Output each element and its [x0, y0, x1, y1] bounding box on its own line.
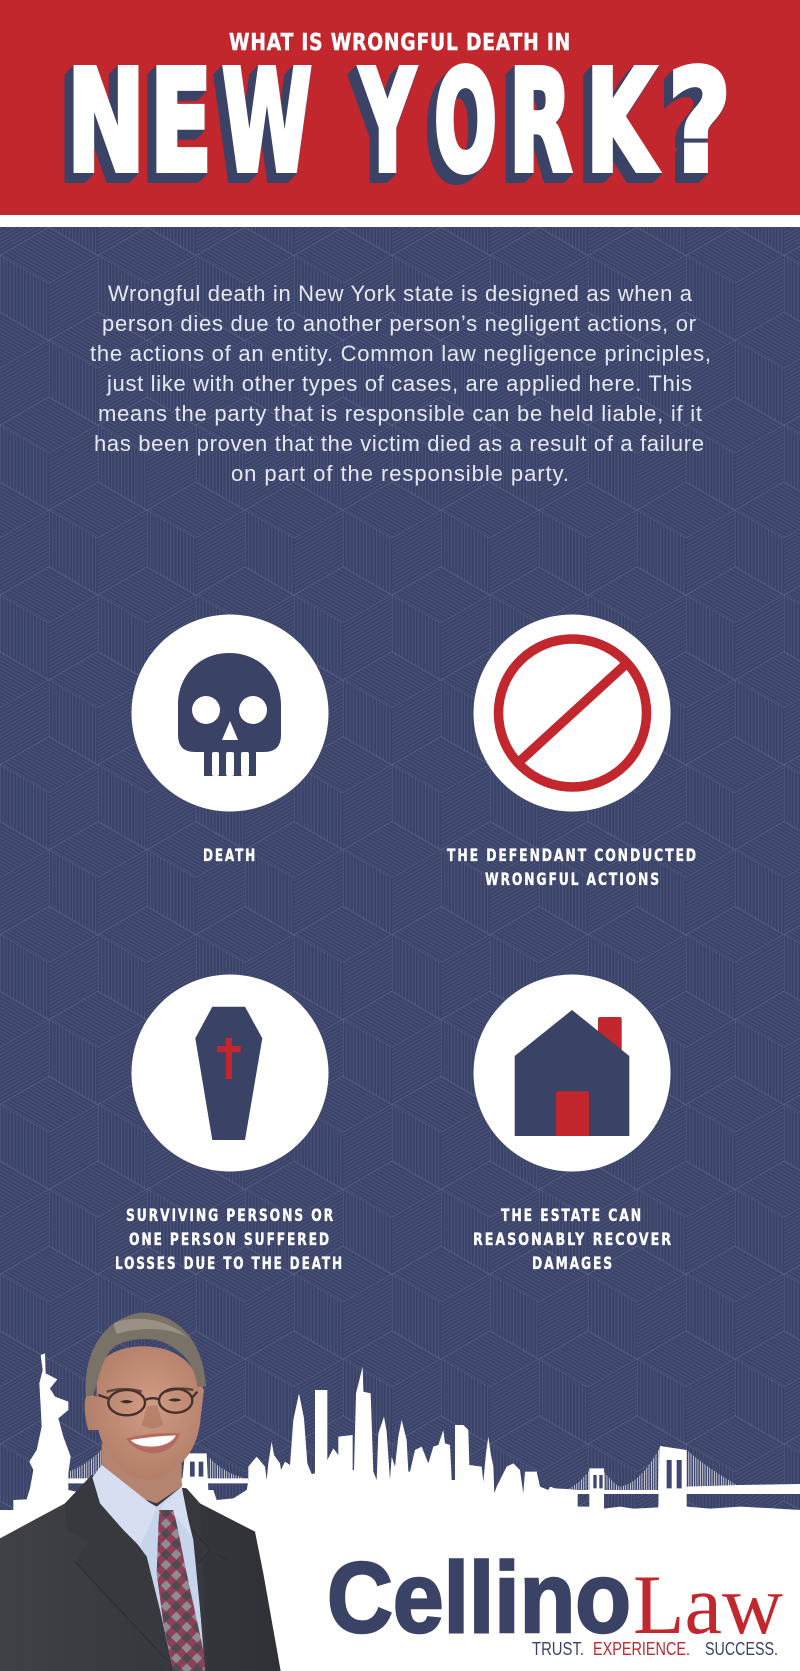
label: estate: DAMAGES [532, 1254, 614, 1273]
intro paragraph: on part of the responsible party. [231, 461, 569, 486]
intro paragraph: person dies due to another person’s negligent actions, or [102, 311, 696, 336]
tagline: SUCCESS. [705, 1639, 778, 1659]
intro paragraph: the actions of an entity. Common law negligence principles, [90, 341, 711, 366]
icon: house [515, 1010, 629, 1136]
tagline [532, 1639, 778, 1659]
panel: red title banner [0, 0, 800, 215]
necktie [157, 1510, 205, 1671]
title: New York: ? [668, 41, 731, 204]
panel: wrongful actions [447, 614, 698, 889]
wordmark Cellino: Cellino [327, 1542, 631, 1654]
label: surviving persons: SURVIVING PERSONS OR [126, 1206, 335, 1225]
lapels [65, 1475, 210, 1671]
label: estate: THE ESTATE CAN [501, 1206, 643, 1225]
panel: surviving persons [115, 974, 344, 1273]
hair [86, 1313, 206, 1397]
title: New York: N [67, 41, 145, 204]
icon: prohibited sign [498, 639, 646, 787]
brows and eyes [107, 1389, 193, 1392]
title eyebrow: WHAT IS WRONGFUL DEATH IN [229, 30, 571, 56]
title: New York: O [434, 41, 497, 204]
neck [102, 1443, 182, 1503]
label: wrongful actions: WRONGFUL ACTIONS [485, 870, 661, 889]
portrait of attorney [0, 1313, 281, 1671]
logo: Cellino Law [327, 1542, 784, 1659]
label: surviving persons: ONE PERSON SUFFERED [129, 1230, 331, 1249]
nose and smile [142, 1405, 163, 1428]
icon: skull [178, 653, 281, 776]
panel: estate [473, 974, 673, 1273]
panel: death [132, 614, 328, 865]
icon: coffin [195, 1007, 262, 1140]
eyeglasses [98, 1389, 197, 1415]
title: New York: R [509, 41, 572, 204]
intro paragraph: means the party that is responsible can be held liable, if it [98, 401, 702, 426]
label: estate [473, 1206, 673, 1273]
footer skyline silhouette [0, 1353, 800, 1671]
title: New York: E [150, 41, 212, 204]
label: surviving persons: LOSSES DUE TO THE DEATH [115, 1254, 344, 1273]
shirt [91, 1465, 205, 1671]
tagline: EXPERIENCE. [593, 1639, 690, 1659]
face [85, 1346, 204, 1480]
label: wrongful actions [447, 846, 698, 889]
label: death: DEATH [203, 846, 257, 865]
tagline: TRUST. [532, 1639, 584, 1659]
title: New York: W [222, 41, 312, 204]
label: surviving persons [115, 1206, 344, 1273]
intro paragraph: just like with other types of cases, are applied here. This [106, 371, 692, 396]
intro paragraph: has been proven that the victim died as a result of a failure [94, 431, 704, 456]
title: New York: K [586, 41, 658, 204]
label: estate: REASONABLY RECOVER [473, 1230, 673, 1249]
title: New York: Y [359, 41, 416, 204]
label: wrongful actions: THE DEFENDANT CONDUCTED [447, 846, 698, 865]
wordmark Law: Law [633, 1558, 784, 1652]
intro paragraph [90, 281, 711, 486]
suit jacket [0, 1475, 281, 1671]
intro paragraph: Wrongful death in New York state is designed as when a [108, 281, 693, 306]
